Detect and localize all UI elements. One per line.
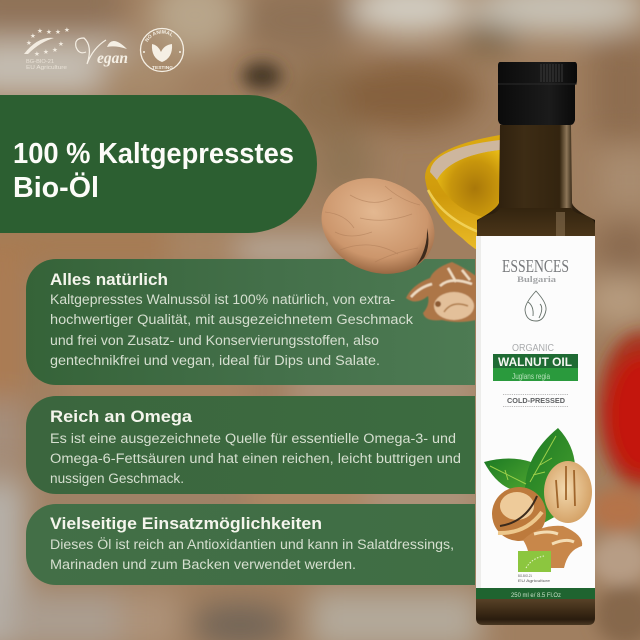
product label: Juglans regia xyxy=(512,372,550,381)
panel: alles natürlich: Alles natürlich xyxy=(50,270,168,289)
brand name xyxy=(502,256,569,284)
bottle base xyxy=(476,588,595,625)
icon: leaves and walnuts illustration xyxy=(484,428,592,568)
title: Bio-Öl xyxy=(13,171,99,204)
panel: reich an omega: Es ist eine ausgezeichnete Quelle für essentielle Omega-3- und xyxy=(50,431,456,446)
product label xyxy=(493,342,578,406)
icon: EU organic stars logo: ★ xyxy=(52,46,58,54)
icon: EU organic stars logo: ★ xyxy=(64,26,70,34)
icon: vegan logo: egan xyxy=(97,50,128,67)
icon: EU organic stars logo: ★ xyxy=(30,32,36,40)
icon: no animal testing badge xyxy=(140,28,184,72)
panel: vielseitige einsatzmöglichkeiten: Dieses Öl ist reich an Antioxidantien und kann in Salatdressings, xyxy=(50,537,454,552)
panel: title banner xyxy=(0,95,317,233)
bottle cap xyxy=(498,62,577,125)
icon: eu organic leaf: EU Agriculture xyxy=(518,578,551,583)
icon: eu organic leaf: BG-BIO-21 xyxy=(518,573,533,578)
panel: vielseitige einsatzmöglichkeiten: Vielseitige Einsatzmöglichkeiten xyxy=(50,514,322,533)
panel: vielseitige einsatzmöglichkeiten: Marinaden und zum Backen verwendet werden. xyxy=(50,557,356,572)
panel: alles natürlich: gentechnikfrei und vegan, ideal für Dips und Salate. xyxy=(50,353,380,368)
brand name: Bulgaria xyxy=(517,274,557,284)
icon: EU organic stars logo: ★ xyxy=(46,28,52,36)
product label: ORGANIC xyxy=(512,342,554,354)
bottle glass xyxy=(477,125,595,236)
title: 100 % Kaltgepresstes xyxy=(13,138,294,170)
panel: alles natürlich: Kaltgepresstes Walnussöl ist 100% natürlich, von extra- xyxy=(50,292,395,307)
icon: oil drop xyxy=(525,291,546,321)
icon: EU organic stars logo: ★ xyxy=(43,48,49,56)
panel: reich an omega: Omega-6-Fettsäuren und hat einen reichen, leicht buttrigen und xyxy=(50,451,461,466)
icon: whole walnut xyxy=(307,162,449,290)
bottle xyxy=(476,62,595,625)
icon: no animal testing badge: TESTING xyxy=(152,65,173,71)
panel: vielseitige einsatzmöglichkeiten xyxy=(26,504,475,585)
icon: eu organic leaf xyxy=(518,551,551,583)
panel: alles natürlich: hochwertiger Qualität, mit ausgezeichnetem Geschmack xyxy=(50,312,413,327)
panel: alles natürlich xyxy=(26,259,475,385)
title xyxy=(13,138,294,204)
icon: no animal testing badge: NO ANIMAL xyxy=(144,30,172,42)
panel: reich an omega: Reich an Omega xyxy=(50,407,193,426)
panel: reich an omega xyxy=(26,396,475,494)
bottle base: 250 ml e/ 8.5 Fl.Oz xyxy=(511,593,561,599)
bottle label xyxy=(476,236,595,588)
panel: reich an omega: nussigen Geschmack. xyxy=(50,471,184,486)
icon: EU organic stars logo: EU Agriculture xyxy=(26,65,67,71)
panel: alles natürlich: und frei von Zusatz- und Konservierungsstoffen, also xyxy=(50,333,379,348)
icon: EU organic stars logo: BG-BIO-21 xyxy=(26,59,54,65)
icon: EU organic stars logo xyxy=(24,26,70,71)
icon: EU organic stars logo: ★ xyxy=(26,39,32,47)
icon: glass bowl of oil xyxy=(425,135,500,258)
icon: EU organic stars logo: ★ xyxy=(34,50,40,58)
brand name: ESSENCES xyxy=(502,256,569,276)
product label: COLD-PRESSED xyxy=(507,396,566,405)
icon: vegan logo xyxy=(76,38,128,67)
icon: EU organic stars logo: ★ xyxy=(55,28,61,36)
icon: walnut pieces xyxy=(406,262,476,322)
icon: EU organic stars logo: ★ xyxy=(58,40,64,48)
product label: WALNUT OIL xyxy=(498,357,572,369)
icon: EU organic stars logo: ★ xyxy=(37,27,43,35)
